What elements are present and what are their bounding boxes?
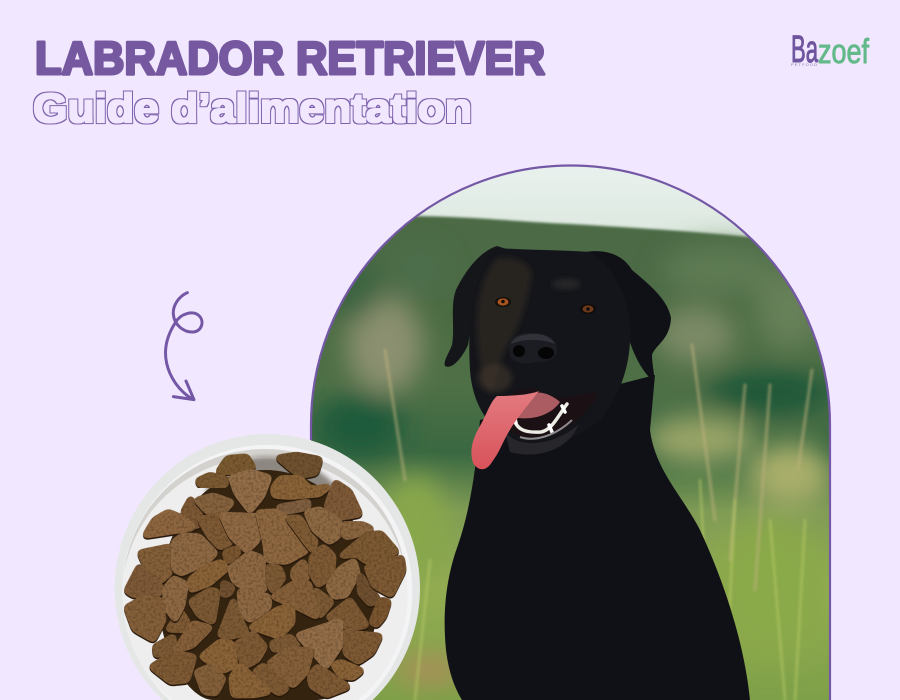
dog tongue xyxy=(471,391,539,469)
bowl xyxy=(115,434,420,700)
photo background xyxy=(311,166,835,700)
dog right ear xyxy=(585,251,671,382)
dog body xyxy=(445,375,750,700)
dog nose xyxy=(509,333,557,363)
title: LABRADOR RETRIEVER xyxy=(35,32,545,84)
grass blades xyxy=(385,345,812,700)
logo: Bazoef: Ba xyxy=(791,29,819,71)
arrow xyxy=(165,293,202,400)
dog chin xyxy=(505,425,578,454)
logo: Bazoef xyxy=(791,29,869,71)
photo arch outline xyxy=(311,166,830,700)
logo: Bazoef: PETFOOD xyxy=(791,62,817,67)
dog face highlights xyxy=(477,258,580,395)
dog mouth xyxy=(514,392,573,440)
subtitle: Guide d’alimentation xyxy=(33,85,472,131)
kibble shadow base xyxy=(159,470,377,700)
dog eye right xyxy=(580,304,596,314)
dog eye left xyxy=(495,297,511,307)
photo: black labrador in a field xyxy=(311,166,835,700)
logo: Bazoef: zoef xyxy=(818,33,869,71)
kibble pieces xyxy=(127,455,403,695)
dog left ear xyxy=(445,246,510,367)
bowl of kibble xyxy=(115,434,420,700)
dog head xyxy=(469,248,630,416)
